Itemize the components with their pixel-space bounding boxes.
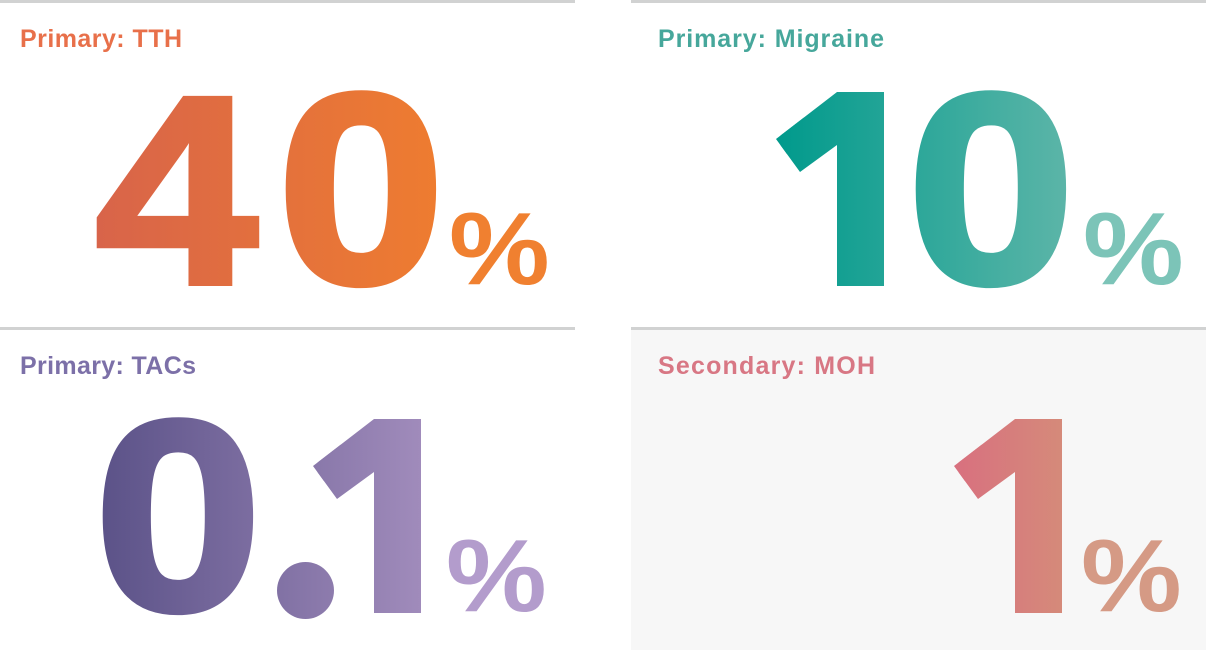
heading: Primary Migraine: Primary: Migraine: [658, 25, 884, 53]
percent sign: %: [446, 518, 547, 633]
heading: Primary TTH: Primary: TTH: [20, 25, 182, 53]
heading: Secondary MOH: Secondary: MOH: [658, 352, 875, 380]
panel: Primary TACs: [0, 327, 575, 650]
panel: Secondary MOH background: [631, 330, 1206, 650]
value: 0.1: .: [286, 474, 324, 630]
heading: Primary TACs: Primary: TACs: [20, 352, 196, 380]
value: 40: 0: [277, 37, 445, 340]
value: 40: 4: [95, 40, 260, 341]
percent sign: %: [1083, 191, 1184, 306]
value: 0.1: [102, 417, 421, 619]
value: 40: [95, 37, 445, 341]
panel: Primary TTH: [0, 0, 575, 341]
panel: Secondary MOH: [631, 327, 1206, 613]
value: 10: 1: [750, 36, 998, 345]
value: 10: 0: [907, 37, 1075, 340]
percent sign: %: [1081, 518, 1182, 633]
percent sign: %: [449, 191, 550, 306]
panel: Primary Migraine: [631, 0, 1206, 288]
value: 10: [776, 90, 1066, 288]
